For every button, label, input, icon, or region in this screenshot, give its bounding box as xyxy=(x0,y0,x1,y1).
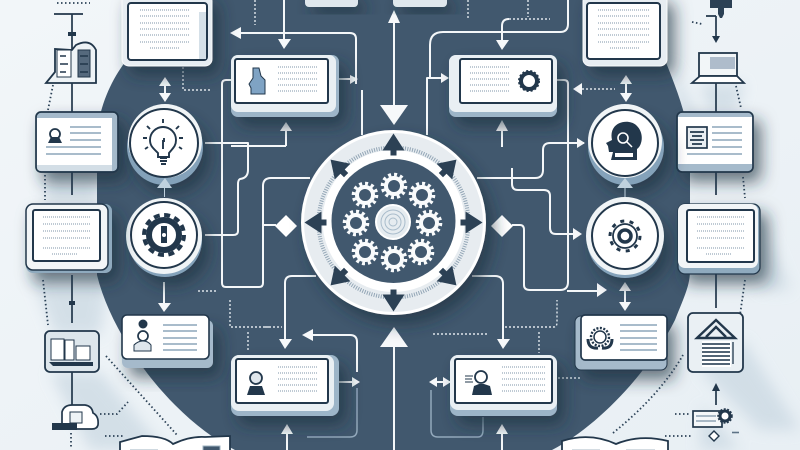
panel: head circle xyxy=(588,104,664,185)
panel: lightbulb circle xyxy=(127,104,203,185)
panel: top-right document card xyxy=(583,0,667,66)
icon: hand xyxy=(249,68,265,94)
panel: lower-left profile card xyxy=(122,315,213,368)
icon: speaking person xyxy=(465,371,492,395)
icon: person xyxy=(134,320,151,351)
icon: small doc with gear xyxy=(693,409,739,441)
icon: top-right tool xyxy=(710,0,732,18)
dial arrows xyxy=(304,134,482,312)
icon: open book bottom-right xyxy=(562,437,668,450)
dark circular backdrop xyxy=(97,0,690,450)
icon: folder box xyxy=(45,331,99,372)
icon: table xyxy=(687,127,707,148)
panel: top stub cards xyxy=(305,0,447,7)
icon: head profile xyxy=(606,122,642,160)
panel: top-left document card xyxy=(122,0,212,66)
arrowheads xyxy=(158,10,632,434)
panel: upper-right card xyxy=(449,55,557,117)
icon: open book bottom-left xyxy=(120,436,230,450)
icon: cloud storage xyxy=(52,405,98,430)
icon: gear with keyhole xyxy=(144,215,184,255)
icon: laptop xyxy=(692,53,744,83)
icon: gear badge xyxy=(519,71,539,91)
icon: avatar portrait xyxy=(247,372,265,395)
panel: gear circle right xyxy=(586,197,664,278)
panel: left profile card xyxy=(36,112,118,172)
panel: left document card xyxy=(26,204,112,273)
central gear dial xyxy=(302,132,484,314)
icon: open book top-left xyxy=(46,42,96,83)
panel: bottom-left card xyxy=(231,355,339,416)
icon: avatar xyxy=(48,129,62,143)
gears xyxy=(344,174,440,270)
panel: bottom-right card xyxy=(450,355,557,416)
diamond: left xyxy=(275,215,297,237)
icon: house box xyxy=(688,313,743,372)
connector lines xyxy=(164,0,626,450)
panel: upper-left card xyxy=(231,55,339,117)
panel: right document card xyxy=(678,204,760,274)
small triangles between circles xyxy=(157,178,633,197)
central target disc xyxy=(376,205,410,239)
icon: outlined gear xyxy=(610,221,640,251)
icon: lightbulb xyxy=(143,119,183,164)
panel: lower-right badge card xyxy=(575,315,667,370)
diamond: right xyxy=(491,215,513,237)
panel: right list card xyxy=(677,112,753,172)
icon: badge gear xyxy=(588,328,612,348)
panel: keyhole gear circle xyxy=(126,198,202,277)
